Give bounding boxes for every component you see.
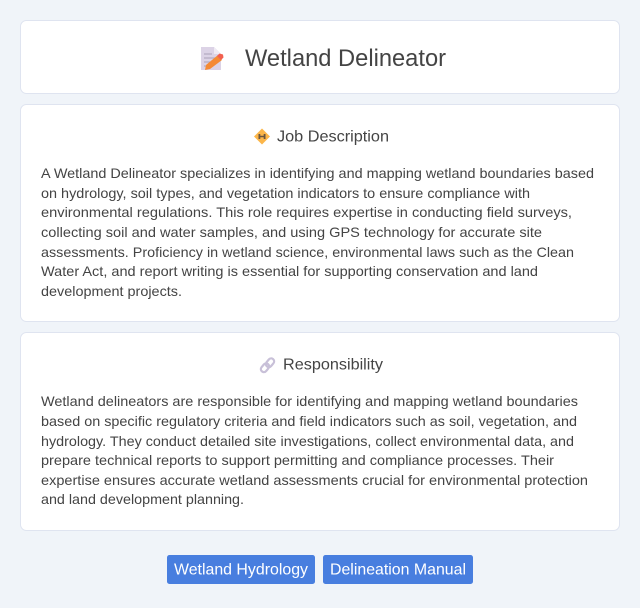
button: wetland hydrology: Wetland Hydrology bbox=[174, 562, 308, 578]
job description text: Water Act, and report writing is essential for supporting conservation and land bbox=[41, 263, 538, 279]
responsibility text: prepare technical reports to support permitting and compliance processes. Their bbox=[41, 452, 554, 468]
responsibility text: based on specific regulatory criteria and field indicators such as soil, vegetation, and bbox=[41, 413, 577, 429]
icon: chain link bbox=[260, 357, 275, 373]
responsibility text: expertise ensures accurate wetland assessments crucial for environmental protection bbox=[41, 472, 588, 488]
panel: job description bbox=[20, 104, 620, 322]
job description text: collecting soil and water samples, and using GPS technology for accurate site bbox=[41, 224, 542, 240]
icon: document with pencil bbox=[201, 47, 224, 70]
responsibility text bbox=[41, 393, 588, 507]
panel: responsibility bbox=[20, 332, 620, 530]
responsibility text: Wetland delineators are responsible for identifying and mapping wetland boundaries bbox=[41, 393, 578, 409]
heading: responsibility: Responsibility bbox=[283, 356, 383, 374]
responsibility text: and land development planning. bbox=[41, 491, 244, 507]
button: wetland hydrology bbox=[167, 555, 315, 584]
job description text bbox=[41, 165, 594, 299]
icon: diamond sign bbox=[254, 128, 270, 144]
button: delineation manual bbox=[323, 555, 473, 584]
responsibility text: hydrology. They conduct detailed site investigations, collect environmental data, and bbox=[41, 433, 574, 449]
job description text: development projects. bbox=[41, 283, 182, 299]
heading: job description: Job Description bbox=[277, 128, 389, 146]
panel: title bbox=[20, 20, 620, 94]
job description text: on hydrology, soil types, and vegetation indicators to ensure compliance with bbox=[41, 185, 530, 201]
title text: Wetland Delineator bbox=[245, 45, 446, 72]
job description text: A Wetland Delineator specializes in identifying and mapping wetland boundaries based bbox=[41, 165, 594, 181]
button: delineation manual: Delineation Manual bbox=[330, 562, 466, 578]
job description text: assessments. Proficiency in wetland science, environmental laws such as the Clean bbox=[41, 244, 574, 260]
job description text: environmental regulations. This role requires expertise in conducting field surveys, bbox=[41, 204, 572, 220]
